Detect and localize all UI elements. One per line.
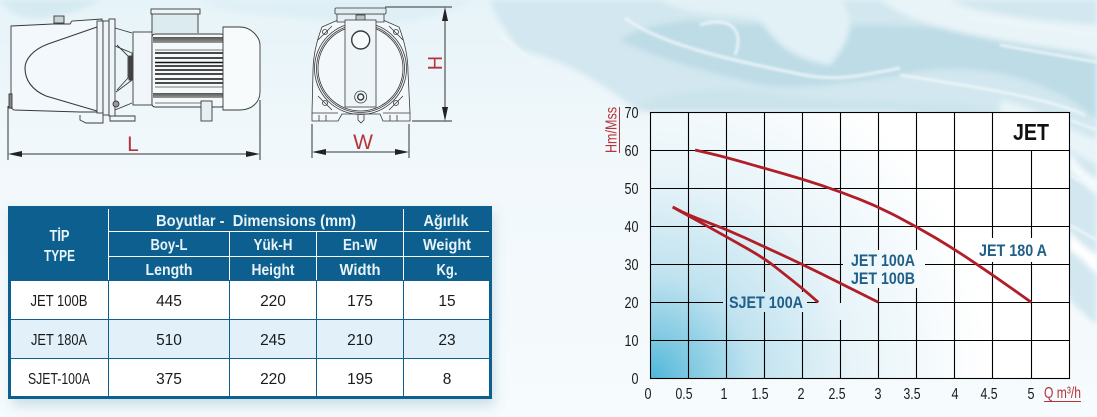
curve label: JET 100A: JET 100A: [851, 251, 915, 270]
table header: Yük-H: [254, 237, 292, 254]
x axis title: Q m³/h: [1044, 385, 1081, 402]
table header: Boyutlar - Dimensions (mm): [156, 213, 356, 230]
table row: JET 100B: [11, 281, 489, 319]
x axis labels: 1: [720, 386, 728, 403]
table shadow: [12, 212, 494, 406]
plate: [345, 20, 376, 107]
x axis labels: [644, 386, 1034, 403]
table header: Width: [340, 262, 380, 279]
table row: JET 100B: 175: [347, 293, 373, 310]
table header: Height: [252, 262, 295, 279]
dimension W: [312, 124, 409, 158]
table header: Boy-L: [150, 237, 188, 254]
housing: [312, 20, 410, 121]
plot area: [650, 112, 1070, 378]
y axis labels: 0: [632, 371, 639, 388]
table row: JET 180A: 210: [347, 332, 373, 349]
lid: [337, 14, 384, 22]
table row: SJET-100A: [11, 359, 489, 396]
y axis labels: [624, 105, 639, 388]
curve: JET 100A / JET 100B: [673, 207, 878, 302]
x axis labels: 4.5: [980, 386, 998, 403]
y axis title: Hm/Mss: [604, 107, 620, 153]
x axis labels: 0: [644, 386, 652, 403]
y axis labels: 30: [624, 257, 639, 274]
table row: JET 180A: 510: [156, 332, 182, 349]
table header: [8, 206, 492, 399]
x axis labels: 1.5: [752, 386, 768, 403]
dimension L: L: [127, 133, 139, 156]
x axis labels: 4: [952, 386, 959, 403]
table row: JET 100B: 445: [156, 293, 182, 310]
performance chart: [604, 105, 1081, 403]
table header: En-W: [343, 237, 378, 254]
y axis labels: 10: [624, 333, 639, 350]
table row: JET 180A: 245: [260, 332, 286, 349]
curve: JET 180 A: [695, 150, 1031, 302]
y axis labels: 60: [624, 143, 639, 160]
dimension H: H: [425, 56, 447, 70]
y axis labels: 70: [624, 105, 639, 122]
x axis labels: 3.5: [904, 386, 920, 403]
table row: JET 180A: JET 180A: [31, 332, 88, 349]
table row: JET 100B: JET 100B: [30, 293, 88, 310]
x axis labels: 3: [874, 386, 882, 403]
table row: JET 180A: [11, 320, 489, 358]
table header: Kg.: [436, 262, 458, 279]
motor body: [152, 34, 224, 107]
table header: TİP: [50, 227, 70, 245]
x axis labels: 2.5: [828, 386, 846, 403]
table row: SJET-100A: 195: [347, 371, 373, 388]
pump side view drawing: [9, 9, 260, 123]
y axis labels: 40: [624, 219, 639, 236]
dimension L: [8, 100, 260, 160]
table row: SJET-100A: 220: [260, 371, 286, 388]
curve: SJET 100A: [673, 207, 818, 302]
x axis labels: 5: [1028, 386, 1034, 403]
curve label: SJET 100A: SJET 100A: [729, 293, 803, 312]
table row: JET 100B: 15: [438, 293, 456, 310]
table header: Ağırlık: [424, 213, 469, 230]
chart grid: [650, 112, 1070, 378]
dimension W: W: [353, 131, 373, 154]
table row: JET 100B: 220: [260, 293, 286, 310]
dimensions table: [8, 206, 492, 399]
dimension H: [385, 7, 452, 121]
curve label: JET 180 A: JET 180 A: [979, 241, 1047, 260]
chart title: JET: [1013, 119, 1049, 145]
pump front view drawing: [312, 8, 410, 123]
curve label: JET 100B: JET 100B: [851, 269, 915, 288]
x axis labels: 2: [798, 386, 804, 403]
x axis labels: 0.5: [676, 386, 692, 403]
motor foot: [201, 101, 212, 121]
pump body: [11, 19, 102, 112]
table header: Weight: [423, 237, 472, 254]
fan cover: [223, 27, 260, 110]
terminal box: [152, 13, 198, 33]
y axis labels: 50: [624, 181, 639, 198]
y axis labels: 20: [624, 295, 639, 312]
table header: TYPE: [44, 248, 75, 265]
table row: JET 180A: 23: [438, 332, 456, 349]
table row: SJET-100A: 375: [156, 371, 182, 388]
table row: SJET-100A: 8: [443, 371, 451, 388]
table header: Length: [146, 262, 192, 279]
table row: SJET-100A: SJET-100A: [28, 371, 91, 388]
